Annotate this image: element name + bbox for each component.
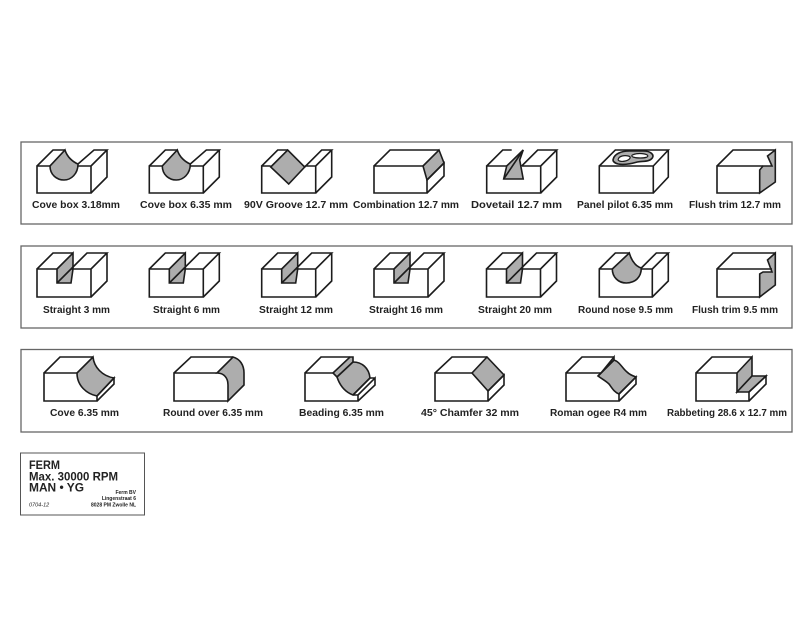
item: Combination 12.7 mm bbox=[353, 150, 459, 211]
item: Beading 6.35 mm: Beading 6.35 mm bbox=[299, 408, 384, 419]
item: Round over 6.35 mm: Round over 6.35 mm bbox=[163, 408, 263, 419]
item: Round over 6.35 mm bbox=[163, 357, 263, 419]
item: Cove 6.35 mm bbox=[44, 357, 119, 419]
item: Straight 3 mm bbox=[37, 253, 110, 316]
item: Beading 6.35 mm bbox=[299, 357, 384, 419]
item: Roman ogee R4 mm bbox=[550, 357, 647, 419]
item: Round nose 9.5 mm: Round nose 9.5 mm bbox=[578, 305, 673, 316]
item: Flush trim 9.5 mm bbox=[692, 253, 778, 316]
item: Straight 3 mm: Straight 3 mm bbox=[43, 305, 110, 316]
item: Straight 6 mm bbox=[149, 253, 220, 316]
item: Cove box 6.35 mm: Cove box 6.35 mm bbox=[140, 200, 232, 211]
item: Roman ogee R4 mm: Roman ogee R4 mm bbox=[550, 408, 647, 419]
panel: row 2 router bits bbox=[21, 246, 792, 328]
item: Panel pilot 6.35 mm: Panel pilot 6.35 mm bbox=[577, 200, 673, 211]
panel: row 3 router bits bbox=[21, 350, 792, 432]
item: Combination 12.7 mm: Combination 12.7 mm bbox=[353, 200, 459, 211]
item: 45° Chamfer 32 mm: 45° Chamfer 32 mm bbox=[421, 408, 519, 419]
item: Straight 20 mm: Straight 20 mm bbox=[478, 305, 552, 316]
item: Cove box 3.18mm bbox=[32, 150, 120, 211]
item: Cove 6.35 mm: Cove 6.35 mm bbox=[50, 408, 119, 419]
text: code: 0704-12 bbox=[29, 502, 49, 508]
label: Ferm specification plate bbox=[20, 453, 144, 515]
item: Flush trim 12.7 mm: Flush trim 12.7 mm bbox=[689, 200, 781, 211]
item: Straight 16 mm: Straight 16 mm bbox=[369, 305, 443, 316]
text: manufacturer address: Lingenstraat 6 bbox=[102, 496, 136, 502]
item: Rabbeting 28.6 x 12.7 mm bbox=[667, 357, 787, 419]
item: Straight 16 mm bbox=[369, 253, 444, 316]
item: Dovetail 12.7 mm bbox=[471, 150, 562, 211]
text: model and speed bbox=[29, 460, 118, 494]
item: Flush trim 9.5 mm: Flush trim 9.5 mm bbox=[692, 305, 778, 316]
item: Rabbeting 28.6 x 12.7 mm: Rabbeting 28.6 x 12.7 mm bbox=[667, 408, 787, 419]
text: model and speed: FERM bbox=[29, 460, 60, 472]
text: model and speed: Max. 30000 RPM bbox=[29, 472, 118, 484]
item: 45° Chamfer 32 mm bbox=[421, 357, 519, 419]
item: Panel pilot 6.35 mm bbox=[577, 150, 673, 211]
item: Straight 12 mm: Straight 12 mm bbox=[259, 305, 333, 316]
item: Flush trim 12.7 mm bbox=[689, 150, 781, 211]
text: manufacturer address: 8028 PM Zwolle NL bbox=[91, 502, 136, 508]
item: 90V Groove 12.7 mm: 90V Groove 12.7 mm bbox=[244, 200, 348, 211]
item: Straight 12 mm bbox=[259, 253, 333, 316]
panel: row 1 router bits bbox=[21, 142, 792, 224]
item: Cove box 3.18mm: Cove box 3.18mm bbox=[32, 200, 120, 211]
item: Straight 20 mm bbox=[478, 253, 556, 316]
text: manufacturer address bbox=[91, 490, 137, 508]
item: Round nose 9.5 mm bbox=[578, 253, 673, 316]
item: Cove box 6.35 mm bbox=[140, 150, 232, 211]
item: Dovetail 12.7 mm: Dovetail 12.7 mm bbox=[471, 200, 562, 211]
item: Straight 6 mm: Straight 6 mm bbox=[153, 305, 220, 316]
item: 90V Groove 12.7 mm bbox=[244, 150, 348, 211]
text: manufacturer address: Ferm BV bbox=[115, 490, 137, 496]
text: model and speed: MAN • YG bbox=[29, 482, 84, 494]
